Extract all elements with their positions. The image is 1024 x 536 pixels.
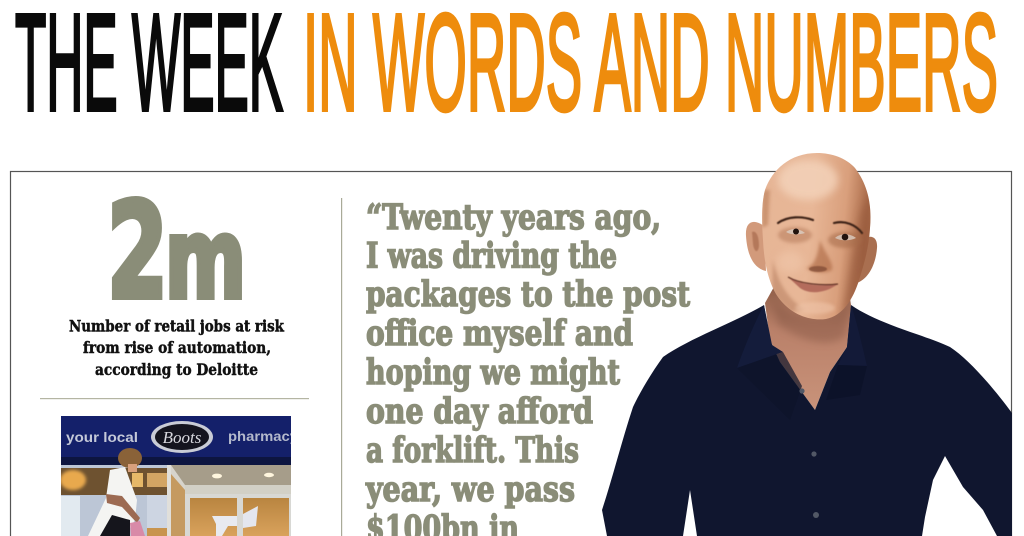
panel border	[10, 172, 1012, 536]
store sign band	[61, 416, 291, 457]
neck	[765, 285, 851, 410]
quote	[365, 197, 690, 536]
shirt collar	[737, 305, 867, 420]
quote: “Twenty years ago,	[366, 197, 661, 238]
Boots logo	[151, 421, 213, 453]
left shop window	[60, 465, 185, 536]
caption: retail jobs	[69, 316, 285, 379]
sign text: pharmacy: pharmacy	[228, 429, 299, 444]
caption: retail jobs: from rise of automation,	[83, 338, 271, 357]
quote: I was driving the	[366, 236, 617, 276]
photo: Boots store front	[60, 416, 299, 536]
head	[762, 153, 870, 319]
divider under caption	[40, 398, 309, 399]
statistic: 2m	[107, 175, 246, 329]
quote: a forklift. This	[366, 430, 579, 471]
statistic: 2m: m	[165, 195, 246, 323]
shirt	[602, 305, 1012, 536]
sign text: your local: your local	[66, 430, 138, 445]
quote: year, we pass	[365, 469, 575, 510]
quote: one day afford	[366, 391, 593, 432]
quote: office myself and	[366, 313, 633, 354]
caption: retail jobs: Number of retail jobs at risk	[69, 316, 285, 336]
statistic: 2m: 2	[107, 175, 168, 329]
portrait: Jeff Bezos	[602, 153, 1024, 536]
shopper	[88, 448, 145, 536]
shirt buttons	[799, 388, 819, 518]
face shading	[762, 160, 874, 320]
caption: retail jobs: according to Deloitte	[95, 360, 258, 379]
nose	[806, 240, 832, 272]
ears	[746, 222, 877, 283]
white backing over panel edge	[1013, 413, 1024, 536]
quote: hoping we might	[366, 352, 620, 393]
neck shadow	[772, 300, 850, 342]
vertical divider	[341, 198, 342, 536]
brows	[778, 217, 862, 233]
glass entrance doors	[190, 498, 289, 536]
eyes	[786, 228, 856, 240]
quote: packages to the post	[366, 274, 690, 315]
mouth	[788, 277, 838, 292]
canopy and ceiling lights	[171, 465, 291, 494]
Boots logo: Boots	[163, 428, 202, 447]
